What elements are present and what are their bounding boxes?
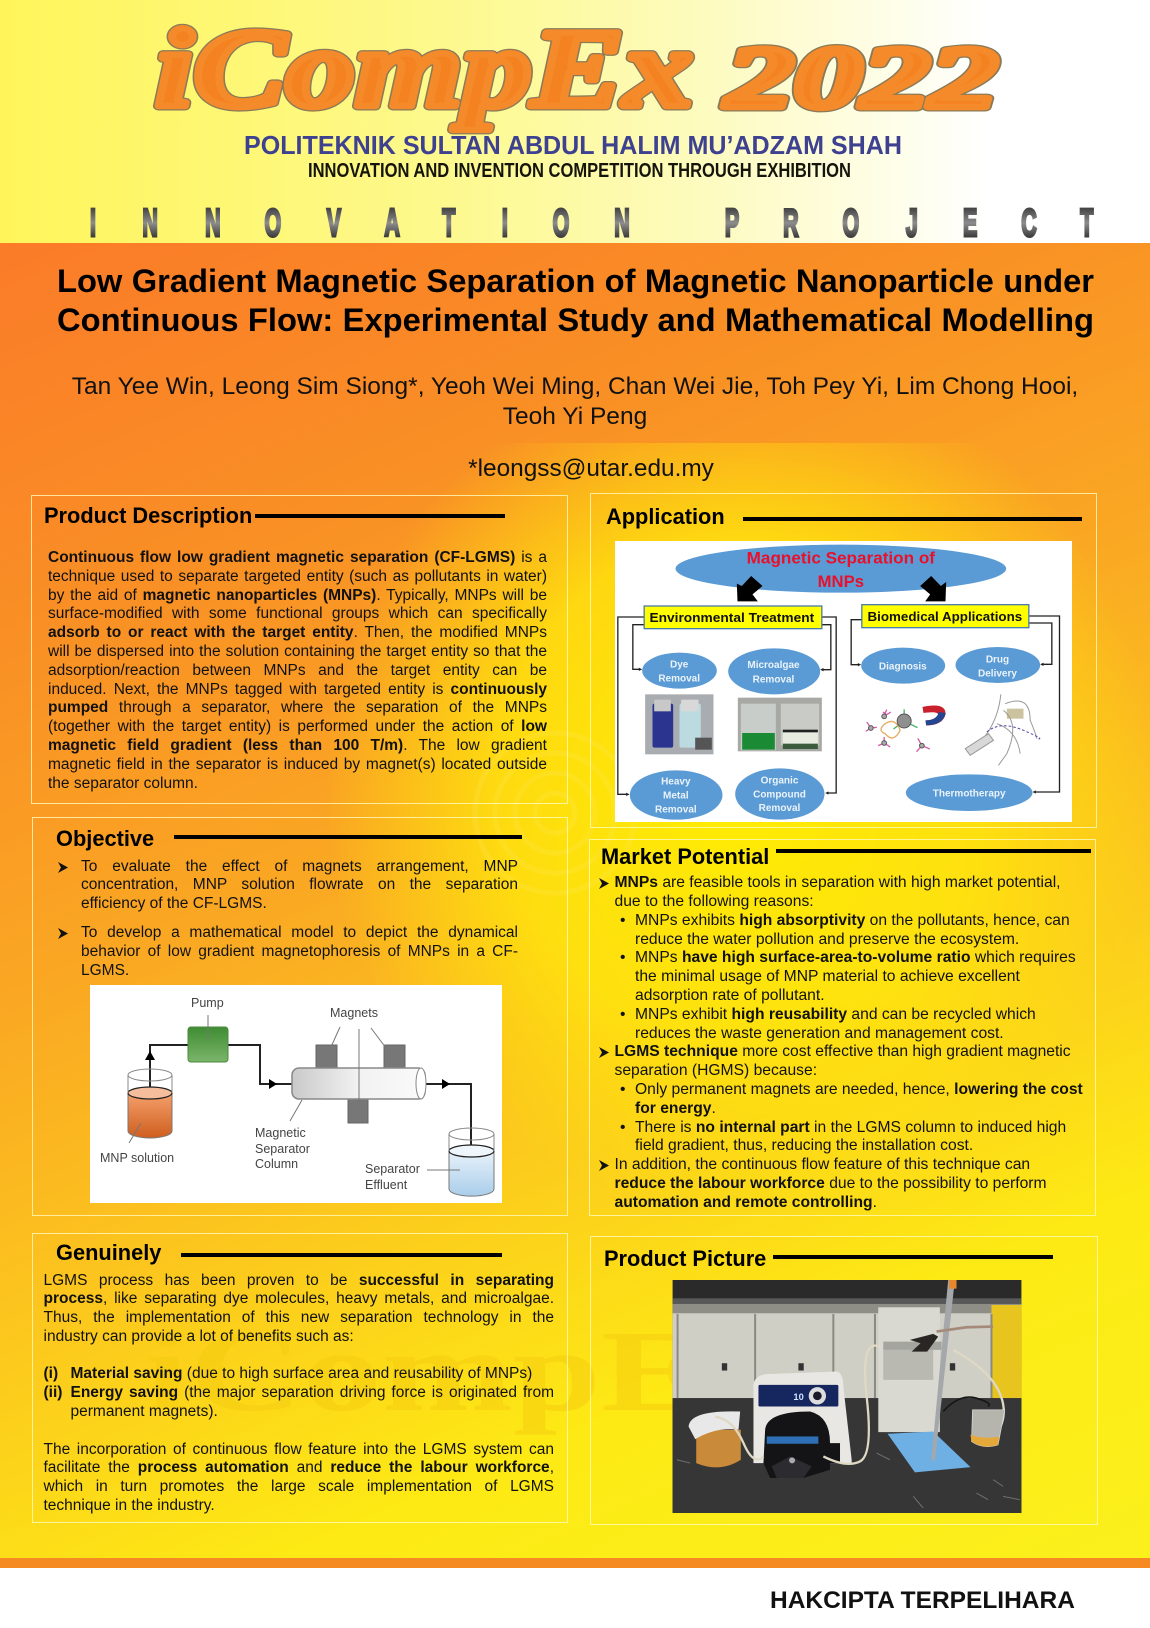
- text: market potential: •: [620, 1006, 625, 1023]
- title: [57, 262, 1094, 338]
- chart: magnetic separation applications: Metal: [663, 791, 689, 802]
- chart: magnetic separation applications: Heavy: [661, 777, 691, 788]
- objective bullet 1: To evaluate the effect of magnets arrangement, MNP: [81, 858, 518, 874]
- text: genuinely intro: process, like separating dye molecules, heavy metals, and microalgae.: [44, 1290, 554, 1307]
- text: genuinely intro: LGMS process has been proven to be successful in separating: [44, 1272, 554, 1288]
- chart: magnetic separation applications: Delivery: [978, 668, 1017, 679]
- banner: innovation project: [90, 201, 1094, 243]
- list: benefits: Material saving (due to high surface area and reusability of MNPs): [70, 1365, 532, 1382]
- text: market potential: reduce the labour workforce due to the possibility to perform: [614, 1175, 1047, 1192]
- text: genuinely intro: industry can provide a lot of benefits such as:: [44, 1328, 354, 1345]
- text: genuinely closing: which in turn promotes the large scale implementation of LGMS: [44, 1478, 554, 1495]
- objective bullet 1: [58, 858, 518, 912]
- authors: [72, 373, 1078, 430]
- text: market potential: •: [620, 912, 625, 929]
- chart: magnetic separation applications: Thermotherapy: [933, 788, 1006, 799]
- photo: pump setup: 10: [793, 1392, 804, 1402]
- text: product description: magnetic field in the separator is induced by magnet(s) located outside: [48, 756, 547, 773]
- heading: application: Application: [606, 504, 725, 529]
- text: market potential: due to the following reasons:: [614, 893, 814, 910]
- text: product description: technique used to separate targeted entity (such as pollutants in water): [48, 568, 547, 585]
- objective bullet 2: To develop a mathematical model to depict the dynamical: [81, 924, 518, 941]
- text: product description: will be dispersed into the solution containing the target entity so that the: [48, 643, 547, 660]
- photo: pump setup: [672, 1280, 1022, 1513]
- header band: [0, 0, 1150, 243]
- chart: magnetic separation applications: Dye: [670, 660, 689, 671]
- text: product description: the separator column.: [48, 775, 198, 792]
- objective bullet 1: efficiency of the CF-LGMS.: [81, 895, 267, 912]
- chart: process flow diagram: Separator: [255, 1142, 310, 1156]
- text: product description: pumped through a separator, where the separation of the MNPs: [48, 699, 547, 716]
- chart: process flow diagram: Magnetic: [255, 1126, 306, 1140]
- chart: process flow diagram: MNP solution: [100, 1151, 174, 1165]
- logo: iCompEx 2022: [153, 7, 1002, 134]
- text: market potential: reduces the waste generation and management cost.: [635, 1025, 1004, 1042]
- objective bullet 2: [58, 924, 518, 979]
- text: market potential: MNPs have high surface-area-to-volume ratio which requires: [635, 949, 1076, 966]
- chart: process flow diagram: Pump: [191, 996, 224, 1010]
- logo: iCompEx 2022: iCompEx: [155, 7, 693, 131]
- text: genuinely closing: [44, 1440, 554, 1514]
- text: product description: magnetic field gradient (less than 100 T/m). The low gradient: [48, 737, 547, 754]
- contact email: *leongss@utar.edu.my: [468, 455, 714, 482]
- text: market potential: MNPs exhibit high reusability and can be recycled which: [635, 1006, 1036, 1023]
- text: product description: [48, 549, 547, 792]
- text: market potential: MNPs are feasible tools in separation with high market potential,: [614, 874, 1061, 891]
- text: market potential: separation (HGMS) because:: [614, 1062, 817, 1079]
- chart: magnetic separation applications: Organic: [761, 776, 799, 787]
- chart: magnetic separation applications: Removal: [753, 674, 795, 685]
- text: product description: adsorb to or react with the target entity. Then, the modified MNPs: [48, 624, 547, 641]
- panel: market potential: [589, 839, 1096, 1216]
- organiser and competition name: [244, 130, 902, 180]
- list: benefits: permanent magnets).: [70, 1403, 218, 1420]
- text: market potential: the minimal usage of MNP material to achieve excellent: [635, 968, 1020, 985]
- chart: magnetic separation applications: Removal: [759, 803, 801, 814]
- chart: magnetic separation applications: Biomedical Applications: [868, 610, 1022, 624]
- text: genuinely intro: [44, 1272, 554, 1345]
- poster background: iCompEx: [145, 1308, 785, 1436]
- chart: magnetic separation applications: Compound: [753, 790, 806, 801]
- chart: magnetic separation applications: Diagnosis: [879, 661, 927, 672]
- text: genuinely intro: Thus, the implementation of this new separation technology in the: [44, 1309, 554, 1326]
- chart: process flow diagram: [90, 985, 502, 1203]
- logo: iCompEx 2022: 2022: [723, 30, 998, 127]
- title: Low Gradient Magnetic Separation of Magnetic Nanoparticle under: [57, 262, 1094, 299]
- chart: magnetic separation applications: [615, 541, 1072, 822]
- chart: process flow diagram: Separator: [365, 1162, 420, 1176]
- text: market potential: •: [620, 1119, 625, 1136]
- panel: application: [590, 493, 1097, 828]
- chart: process flow diagram: Column: [255, 1157, 298, 1171]
- text: market potential: There is no internal part in the LGMS column to induced high: [635, 1119, 1066, 1136]
- text: market potential: adsorption rate of pollutant.: [635, 987, 825, 1004]
- chart: magnetic separation applications: Removal: [658, 674, 700, 685]
- list: benefits: (ii): [44, 1384, 62, 1401]
- text: market potential: MNPs exhibits high absorptivity on the pollutants, hence, can: [635, 912, 1070, 929]
- text: market potential: automation and remote controlling.: [614, 1194, 877, 1211]
- text: market potential: Only permanent magnets are needed, hence, lowering the cost: [635, 1081, 1083, 1098]
- chart: magnetic separation applications: Environmental Treatment: [650, 611, 815, 625]
- text: market potential: for energy.: [635, 1100, 716, 1117]
- objective bullet 2: behavior of low gradient magnetophoresis of MNPs in a CF-: [81, 943, 518, 960]
- text: genuinely closing: The incorporation of continuous flow feature into the LGMS system can: [44, 1440, 554, 1458]
- text: product description: (together with the target entity) is performed under the action of low: [48, 718, 547, 735]
- chart: magnetic separation applications: Magnetic Separation of: [747, 549, 935, 568]
- list: benefits: Energy saving (the major separation driving force is originated from: [70, 1384, 554, 1401]
- text: product description: Continuous flow low gradient magnetic separation (CF-LGMS) is a: [48, 549, 547, 566]
- footer: copyright note: HAKCIPTA TERPELIHARA: [770, 1587, 1075, 1614]
- authors: Tan Yee Win, Leong Sim Siong*, Yeoh Wei Ming, Chan Wei Jie, Toh Pey Yi, Lim Chong Hooi,: [72, 373, 1078, 400]
- panel: product description: [31, 495, 568, 804]
- text: product description: adsorption/reaction between MNPs and the target entity can be: [48, 662, 547, 679]
- text: market potential: [599, 874, 1083, 1211]
- panel: objective: [32, 817, 568, 1216]
- text: market potential: LGMS technique more cost effective than high gradient magnetic: [614, 1043, 1071, 1060]
- heading: genuinely: Genuinely: [56, 1240, 161, 1265]
- heading: objective: Objective: [56, 826, 154, 851]
- list: benefits: [44, 1365, 554, 1420]
- chart: magnetic separation applications: Removal: [655, 804, 697, 815]
- list: benefits: (i): [44, 1365, 58, 1382]
- text: market potential: •: [620, 1081, 625, 1098]
- panel: product picture: [590, 1236, 1098, 1525]
- title: Continuous Flow: Experimental Study and Mathematical Modelling: [57, 301, 1094, 338]
- text: market potential: •: [620, 949, 625, 966]
- organiser and competition name: POLITEKNIK SULTAN ABDUL HALIM MU’ADZAM SHAH: [244, 130, 902, 160]
- logo: iCompEx 2022: 2022: [723, 30, 998, 127]
- text: market potential: field gradient, thus, reducing the installation cost.: [635, 1137, 973, 1154]
- chart: magnetic separation applications: MNPs: [818, 572, 864, 591]
- heading: product description: Product Description: [44, 503, 252, 528]
- chart: magnetic separation applications: Microalgae: [747, 660, 800, 671]
- text: product description: induced. Next, the MNPs tagged with targeted entity is continuously: [48, 681, 547, 698]
- text: product description: by the aid of magnetic nanoparticles (MNPs). Typically, MNPs will be: [48, 587, 547, 604]
- footer bar: [0, 1558, 1150, 1568]
- text: product description: surface-modified with some functional groups which can specifically: [48, 605, 547, 622]
- chart: process flow diagram: Magnets: [330, 1006, 378, 1020]
- text: market potential: In addition, the continuous flow feature of this technique can: [614, 1156, 1030, 1173]
- authors: Teoh Yi Peng: [503, 403, 647, 430]
- heading: product picture: Product Picture: [604, 1246, 766, 1271]
- logo: iCompEx 2022: iCompEx: [155, 7, 693, 131]
- text: market potential: reduce the water pollution and preserve the ecosystem.: [635, 931, 1019, 948]
- panel: genuinely: [32, 1233, 568, 1523]
- heading: market potential: Market Potential: [601, 844, 769, 869]
- text: genuinely closing: facilitate the process automation and reduce the labour workforce,: [44, 1459, 554, 1476]
- chart: process flow diagram: Effluent: [365, 1178, 408, 1192]
- objective bullet 2: LGMS.: [81, 962, 129, 979]
- text: genuinely closing: technique in the industry.: [44, 1497, 215, 1514]
- chart: magnetic separation applications: Drug: [986, 654, 1009, 665]
- objective bullet 1: concentration, MNP solution flowrate on the separation: [81, 876, 518, 893]
